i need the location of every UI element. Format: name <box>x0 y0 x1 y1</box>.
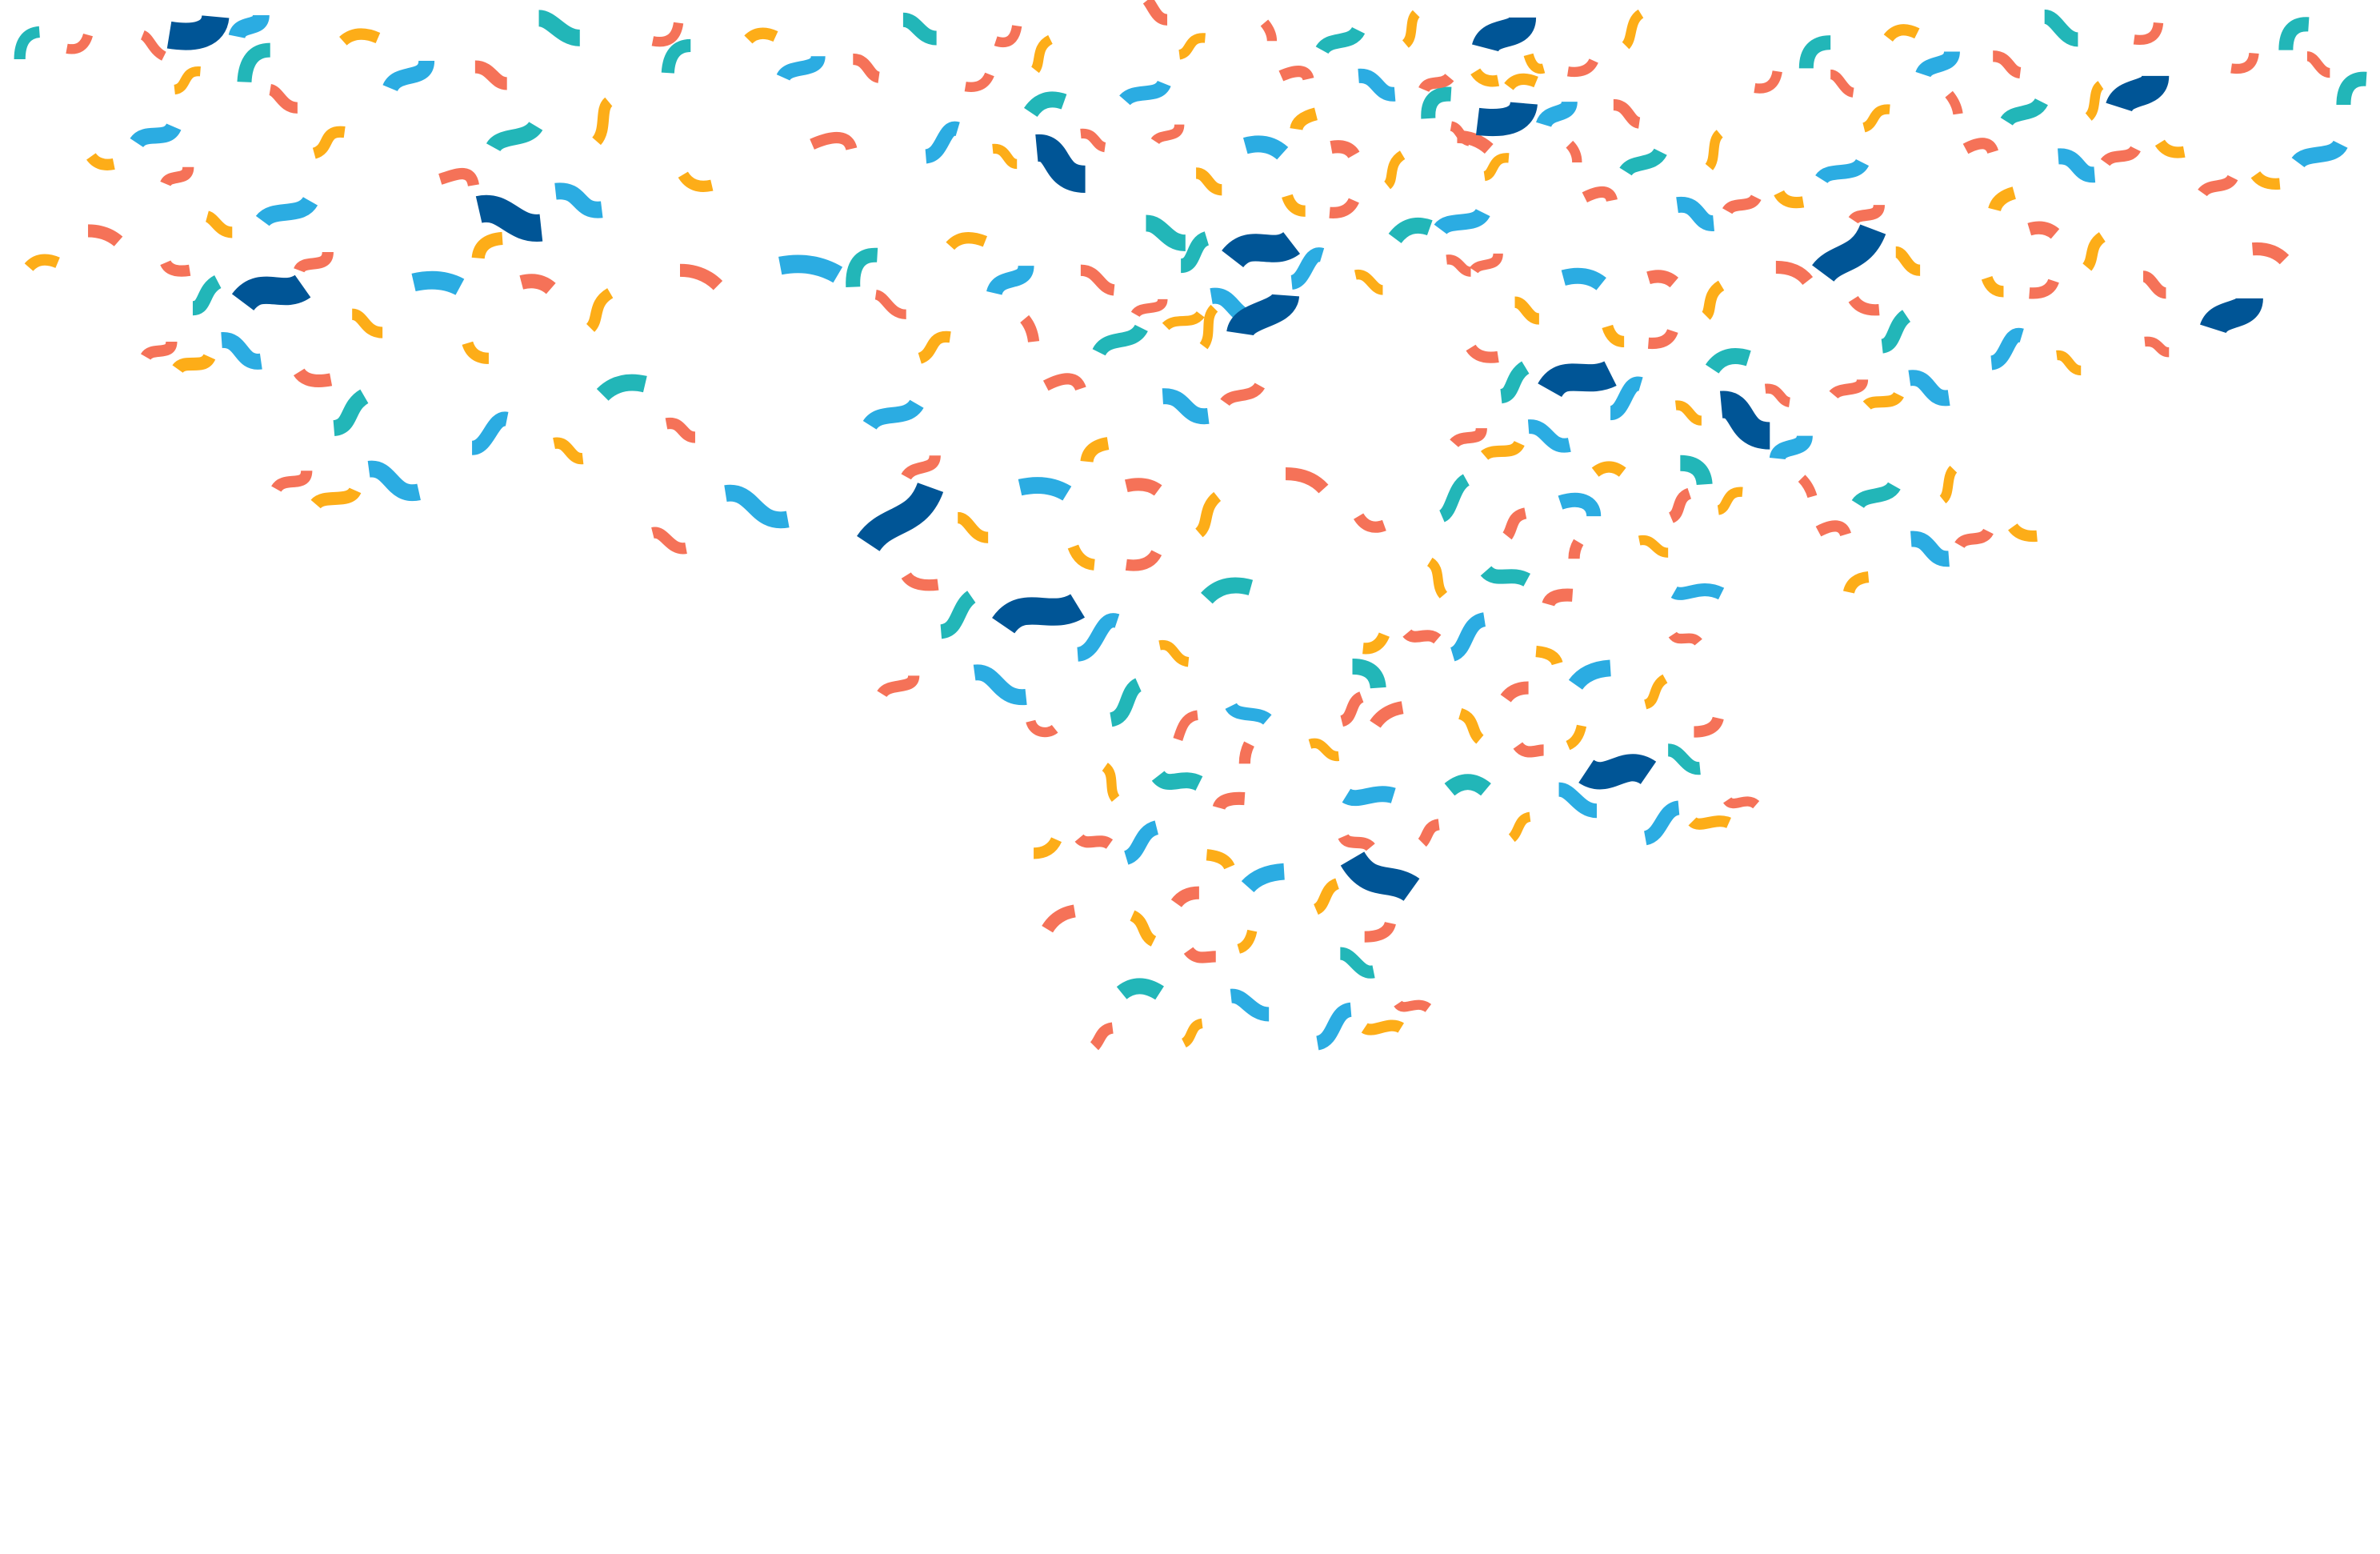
confetti: amber pieces <box>29 14 2280 1043</box>
confetti: coral pieces <box>66 0 2330 1046</box>
confetti: navy pieces <box>170 17 2250 890</box>
confetti: sky blue pieces <box>137 15 2341 1043</box>
confetti: teal pieces <box>20 17 2366 993</box>
